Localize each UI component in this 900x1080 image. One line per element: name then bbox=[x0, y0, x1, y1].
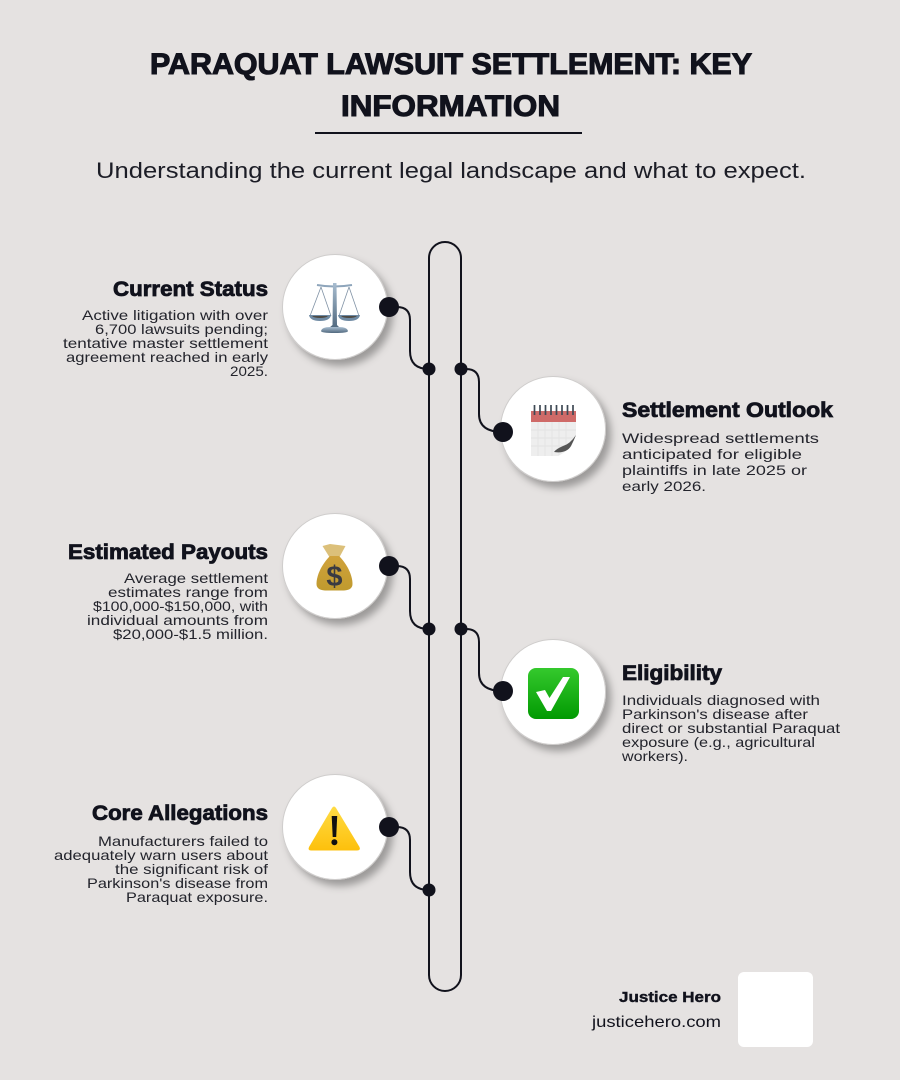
connector: current status bbox=[389, 307, 436, 376]
text: settlement outlook: anticipated for eligible bbox=[622, 446, 802, 462]
text: eligibility: Parkinson's disease after bbox=[622, 706, 808, 722]
footer: website: justicehero.com bbox=[591, 1014, 721, 1031]
text: settlement outlook: early 2026. bbox=[622, 478, 706, 494]
text: estimated payouts: estimates range from bbox=[108, 584, 268, 600]
node: current status bbox=[379, 297, 399, 317]
panel: core allegations bbox=[54, 774, 388, 905]
connector: eligibility bbox=[454, 622, 503, 691]
panel: estimated payouts bbox=[68, 514, 388, 642]
node: core allegations bbox=[379, 817, 399, 837]
text: core allegations: Paraquat exposure. bbox=[126, 889, 268, 905]
footer: brand name: Justice Hero bbox=[619, 989, 721, 1006]
icon circle: money bag bbox=[282, 514, 388, 618]
text: current status: agreement reached in early bbox=[66, 349, 268, 365]
icon circle: check mark bbox=[500, 640, 606, 744]
node: settlement outlook bbox=[493, 422, 513, 442]
text: core allegations: Parkinson's disease from bbox=[87, 875, 268, 891]
connector: settlement outlook bbox=[454, 362, 503, 432]
heading: core allegations: Core Allegations bbox=[92, 802, 268, 825]
panel: eligibility bbox=[500, 640, 840, 764]
text: eligibility: exposure (e.g., agricultural bbox=[622, 734, 815, 750]
heading: settlement outlook: Settlement Outlook bbox=[622, 399, 833, 422]
icon circle: balance scale bbox=[282, 254, 388, 360]
text: eligibility: workers). bbox=[621, 748, 688, 764]
text: eligibility: Individuals diagnosed with bbox=[622, 692, 820, 708]
text: settlement outlook: Widespread settlements bbox=[622, 430, 819, 446]
panel: current status bbox=[63, 254, 388, 379]
node: estimated payouts bbox=[379, 556, 399, 576]
title: INFORMATION bbox=[341, 90, 560, 123]
subtitle: Understanding the current legal landscape and what to expect. bbox=[96, 158, 806, 183]
footer: logo placeholder bbox=[738, 972, 813, 1047]
panel: settlement outlook bbox=[500, 376, 833, 494]
icon circle: money bag: $ bbox=[326, 561, 343, 593]
text: core allegations: Manufacturers failed to bbox=[98, 833, 268, 849]
text: current status: 6,700 lawsuits pending; bbox=[95, 321, 268, 337]
icon circle: warning bbox=[282, 774, 388, 880]
title: PARAQUAT LAWSUIT SETTLEMENT: KEY bbox=[150, 48, 752, 81]
heading: current status: Current Status bbox=[113, 278, 268, 301]
text: core allegations: adequately warn users about bbox=[54, 847, 268, 863]
text: estimated payouts: individual amounts from bbox=[87, 612, 268, 628]
heading: estimated payouts: Estimated Payouts bbox=[68, 541, 268, 564]
text: estimated payouts: $100,000-$150,000, with bbox=[93, 598, 268, 614]
connector: core allegations bbox=[389, 827, 436, 896]
text: estimated payouts bbox=[87, 570, 268, 642]
text: current status bbox=[63, 307, 268, 379]
connector: estimated payouts bbox=[389, 566, 436, 636]
text: settlement outlook: plaintiffs in late 2025 or bbox=[622, 462, 807, 478]
heading: eligibility: Eligibility bbox=[622, 662, 722, 685]
timeline spine bbox=[429, 242, 461, 991]
text: current status: Active litigation with over bbox=[82, 307, 268, 323]
text: core allegations: the significant risk of bbox=[115, 861, 268, 877]
title bbox=[150, 48, 752, 123]
text: estimated payouts: Average settlement bbox=[124, 570, 268, 586]
text: current status: 2025. bbox=[230, 363, 268, 379]
node: eligibility bbox=[493, 681, 513, 701]
text: settlement outlook bbox=[622, 430, 819, 494]
text: current status: tentative master settlement bbox=[63, 335, 268, 351]
text: eligibility: direct or substantial Paraquat bbox=[622, 720, 840, 736]
text: estimated payouts: $20,000-$1.5 million. bbox=[113, 626, 268, 642]
icon circle: calendar bbox=[500, 376, 606, 482]
text: eligibility bbox=[621, 692, 840, 764]
text: core allegations bbox=[54, 833, 268, 905]
